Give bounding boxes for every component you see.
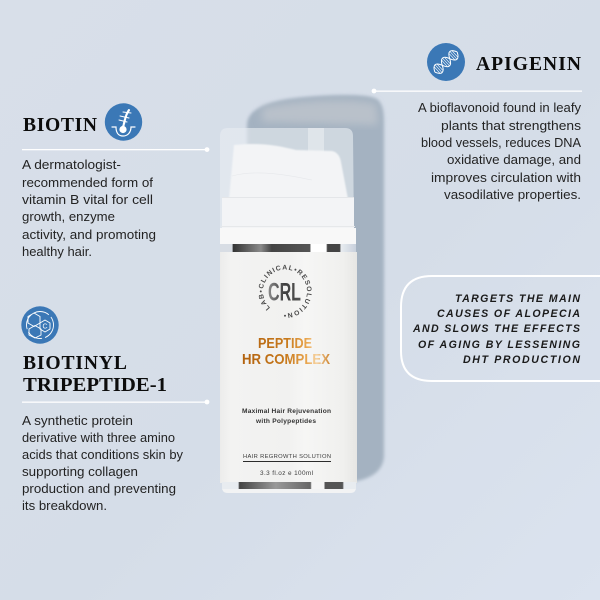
callout: TARGETS THE MAIN	[455, 293, 580, 305]
bottle base	[222, 489, 356, 493]
product shadow	[247, 95, 384, 490]
heading: biotinyl tripeptide-1: TRIPEPTIDE-1	[23, 375, 167, 396]
pump collar	[222, 197, 354, 229]
text: biotinyl description: derivative with three amino	[22, 431, 175, 445]
text: biotinyl description: supporting collagen	[22, 465, 138, 479]
text: apigenin description: vasodilative properties.	[444, 188, 581, 202]
pump head	[229, 144, 348, 199]
text: biotin description: vitamin B vital for cell	[22, 193, 153, 207]
text: biotin description: activity, and promoting	[22, 228, 156, 242]
top silver band	[220, 244, 356, 252]
callout: CAUSES OF ALOPECIA	[437, 308, 580, 320]
product name	[242, 335, 330, 368]
heading: biotin: BIOTIN	[23, 115, 97, 136]
callout: DHT PRODUCTION	[463, 354, 580, 366]
product descriptor: HAIR REGROWTH SOLUTION	[243, 454, 331, 460]
text: biotin description: A dermatologist-	[22, 158, 121, 172]
text: apigenin description: improves circulation with	[431, 171, 581, 185]
panel: apigenin	[372, 43, 582, 202]
text: biotin description: recommended form of	[22, 176, 154, 190]
logo: CRL	[268, 278, 301, 306]
text: biotin description	[22, 158, 156, 259]
callout: OF AGING BY LESSENING	[418, 339, 580, 351]
bottom silver band	[222, 482, 356, 489]
icon: dna	[427, 43, 465, 81]
text: biotinyl description: acids that conditions skin by	[22, 448, 184, 462]
bottle cap	[220, 128, 354, 232]
text: biotinyl description: production and preventing	[22, 482, 176, 496]
panel: biotin	[22, 103, 209, 259]
heading: biotinyl tripeptide-1	[23, 353, 167, 396]
product descriptor: 3.3 fl.oz e 100ml	[260, 470, 313, 477]
product subtitle: with Polypeptides	[255, 418, 316, 425]
product subtitle	[242, 408, 331, 425]
panel: biotinyl tripeptide-1	[21, 306, 209, 513]
text: apigenin description: blood vessels, reduces DNA	[421, 136, 582, 150]
callout: AND SLOWS THE EFFECTS	[412, 323, 580, 335]
icon: molecule: C	[42, 324, 48, 330]
heading: apigenin: APIGENIN	[476, 54, 581, 75]
text: biotinyl description	[22, 414, 184, 513]
logo: LAB•CLINICAL•RESOLUTION•	[258, 264, 312, 318]
text: apigenin description: oxidative damage, and	[447, 153, 581, 167]
text: biotin description: healthy hair.	[22, 245, 92, 259]
text: apigenin description: plants that strengthens	[441, 119, 581, 133]
divider: biotin	[22, 147, 209, 152]
heading: biotinyl tripeptide-1: BIOTINYL	[23, 353, 127, 374]
divider: apigenin	[372, 89, 582, 93]
text: biotinyl description: its breakdown.	[22, 499, 107, 513]
bottle body	[220, 252, 357, 483]
product name: HR COMPLEX	[242, 351, 330, 368]
text: biotin description: growth, enzyme	[22, 210, 115, 224]
product subtitle: Maximal Hair Rejuvenation	[242, 408, 331, 415]
text: apigenin description: A bioflavonoid found in leafy	[418, 101, 582, 115]
icon: molecule	[21, 306, 59, 344]
icon: hair follicle	[105, 103, 142, 141]
product bottle	[220, 128, 357, 493]
divider: biotinyl	[22, 400, 209, 404]
neck	[220, 228, 356, 244]
callout	[401, 276, 600, 381]
product descriptor	[243, 454, 331, 477]
text: apigenin description	[418, 101, 582, 202]
product name: PEPTIDE	[258, 335, 312, 352]
text: biotinyl description: A synthetic protein	[22, 414, 133, 428]
